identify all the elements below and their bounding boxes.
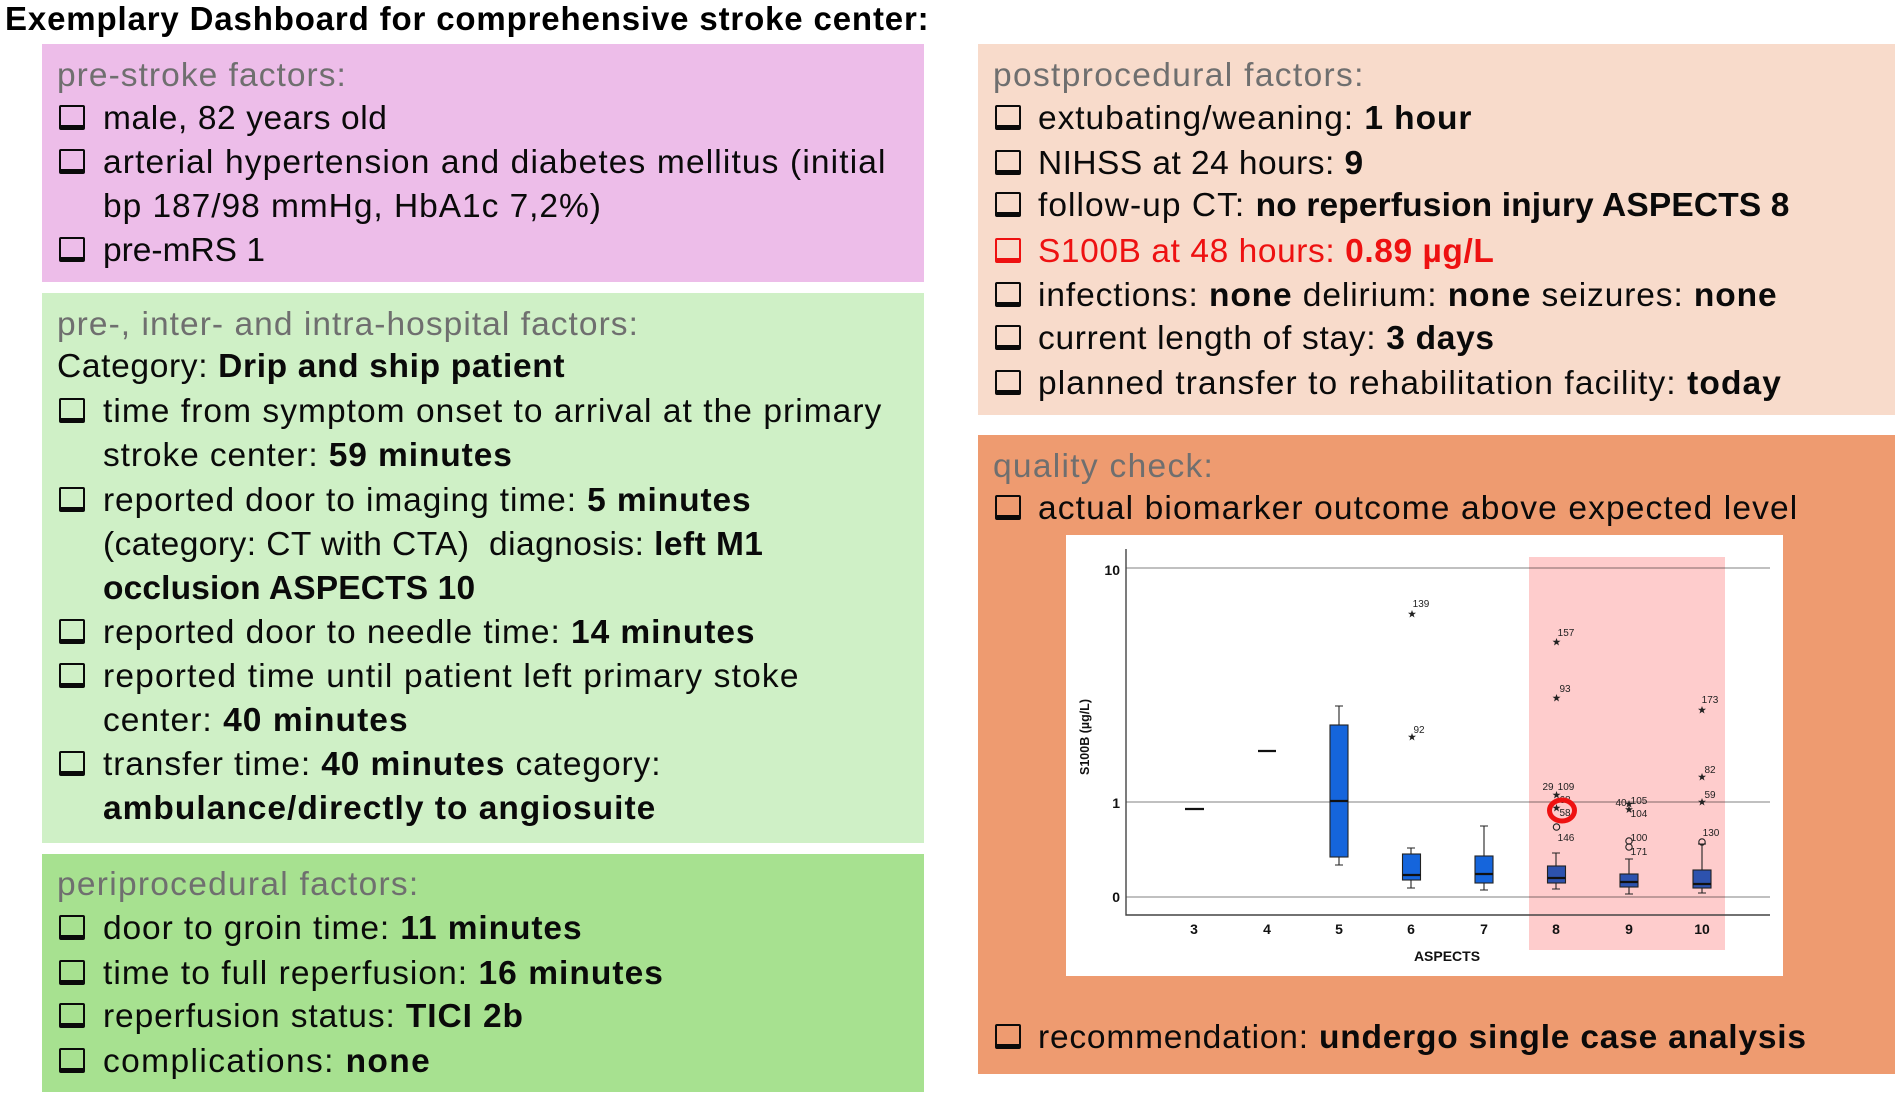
item: hypertension and diabetes: bp 187/98 mmHg, HbA1c 7,2%) <box>103 188 602 225</box>
outlier labels: 130 <box>1703 828 1720 839</box>
item: door to needle: reported door to needle time: 14 minutes <box>103 614 756 651</box>
x axis tick labels: 10 <box>1694 921 1710 937</box>
item: transfer time: transfer time: 40 minutes category: <box>103 746 661 783</box>
y axis tick labels <box>1104 562 1120 905</box>
highlight band <box>1529 557 1725 950</box>
item: transfer time: ambulance/directly to angiosuite <box>103 790 656 827</box>
title: Exemplary Dashboard for comprehensive stroke center: <box>5 0 930 37</box>
item: sex and age: male, 82 years old <box>103 100 388 137</box>
red ring: patient marker <box>1550 800 1574 821</box>
box: ASPECTS 6 <box>1402 848 1420 888</box>
outlier labels: 146 <box>1558 833 1575 844</box>
item: onset to arrival: time from symptom onset to arrival at the primary <box>103 393 882 430</box>
outlier labels: 157 <box>1558 628 1575 639</box>
outlier labels: 59 <box>1704 790 1716 801</box>
panel: pre-, inter- and intra-hospital factors <box>42 293 924 843</box>
item: extubating: extubating/weaning: 1 hour <box>1038 100 1472 137</box>
outlier labels: 92 <box>1413 725 1425 736</box>
panel: periprocedural factors <box>42 854 924 1092</box>
panel: quality check <box>978 435 1895 1074</box>
box: ASPECTS 7 <box>1475 826 1493 890</box>
y axis tick labels: 1 <box>1112 795 1120 811</box>
heading: pre-stroke factors: pre-stroke factors: <box>57 57 347 94</box>
axes <box>1126 549 1770 915</box>
heading: quality check: quality check: <box>993 448 1214 485</box>
outlier labels: 109 <box>1558 782 1575 793</box>
box: ASPECTS 8 <box>1548 853 1566 889</box>
x axis tick labels: 8 <box>1552 921 1560 937</box>
item: door to imaging: (category: CT with CTA) diagnosis: left M1 <box>103 526 763 563</box>
item: NIHSS: NIHSS at 24 hours: 9 <box>1038 145 1364 182</box>
item: onset to arrival <box>59 393 882 474</box>
outlier labels: 93 <box>1559 684 1571 695</box>
chart: S100B by ASPECTS box plot <box>1066 535 1783 976</box>
item: complications: complications: none <box>103 1043 431 1080</box>
outlier labels <box>1413 599 1720 858</box>
outlier labels: 40 <box>1615 798 1627 809</box>
outlier labels: 100 <box>1631 833 1648 844</box>
item: time until leaving primary center <box>59 658 800 739</box>
heading: postprocedural factors: postprocedural factors: <box>993 57 1365 94</box>
outlier labels: 105 <box>1631 796 1648 807</box>
box plots <box>1330 706 1711 894</box>
box: ASPECTS 5 <box>1330 706 1348 865</box>
item: door to imaging: occlusion ASPECTS 10 <box>103 570 475 607</box>
outlier stars <box>1408 610 1706 813</box>
item: time to reperfusion: time to full reperfusion: 16 minutes <box>103 955 664 992</box>
median lines for categories 3 and 4 <box>1185 751 1276 809</box>
item: reperfusion status: reperfusion status: TICI 2b <box>103 998 524 1035</box>
box: ASPECTS 9 <box>1620 859 1638 894</box>
x axis tick labels: 3 <box>1190 921 1198 937</box>
y axis tick labels: 10 <box>1104 562 1120 578</box>
panel: pre-stroke factors <box>42 44 924 282</box>
item: pre-mRS: pre-mRS 1 <box>103 232 265 269</box>
panel: postprocedural factors <box>978 44 1895 415</box>
box: ASPECTS 10 <box>1693 844 1711 893</box>
x axis tick labels: 7 <box>1480 921 1488 937</box>
item: S100B value: S100B at 48 hours: 0.89 µg/L <box>1038 233 1494 270</box>
item: follow-up CT: follow-up CT: no reperfusion injury ASPECTS 8 <box>1038 187 1790 224</box>
item: onset to arrival: stroke center: 59 minutes <box>103 437 513 474</box>
y axis tick labels: 0 <box>1112 889 1120 905</box>
item: door to groin: door to groin time: 11 minutes <box>103 910 582 947</box>
outlier labels: 58 <box>1559 808 1571 819</box>
y axis title: S100B (µg/L) <box>1078 699 1092 775</box>
outlier labels: 139 <box>1413 599 1430 610</box>
x axis title: ASPECTS <box>1414 948 1480 964</box>
heading: periprocedural factors: periprocedural factors: <box>57 866 420 903</box>
outlier labels: 68 <box>1559 795 1571 806</box>
item: recommendation: recommendation: undergo single case analysis <box>1038 1019 1807 1056</box>
item: biomarker outcome: actual biomarker outcome above expected level <box>1038 490 1798 527</box>
item: time until leaving primary center: reported time until patient left primary stoke <box>103 658 800 695</box>
item: hypertension and diabetes: arterial hypertension and diabetes mellitus (initial <box>103 144 887 181</box>
x axis tick labels: 9 <box>1625 921 1633 937</box>
item: length of stay: current length of stay: 3 days <box>1038 320 1495 357</box>
x axis tick labels: 6 <box>1407 921 1415 937</box>
outlier circles <box>1553 824 1705 850</box>
outlier labels: 82 <box>1704 765 1716 776</box>
outlier labels: 173 <box>1702 695 1719 706</box>
item: time until leaving primary center: center: 40 minutes <box>103 702 409 739</box>
item: hypertension and diabetes <box>59 144 887 225</box>
item: door to imaging: reported door to imaging time: 5 minutes <box>103 482 752 519</box>
outlier labels: 171 <box>1631 847 1648 858</box>
item: planned transfer: planned transfer to rehabilitation facility: today <box>1038 365 1782 402</box>
item: transfer time <box>59 746 661 827</box>
item: door to imaging <box>59 482 763 607</box>
x axis tick labels <box>1190 921 1710 937</box>
item: complications after procedure: infections: none delirium: none seizures: none <box>1038 277 1778 314</box>
heading: hospital factors: pre-, inter- and intra-hospital factors: <box>57 306 639 343</box>
outlier labels: 29 <box>1542 782 1554 793</box>
x axis tick labels: 5 <box>1335 921 1343 937</box>
x axis tick labels: 4 <box>1263 921 1271 937</box>
category line: Category: Drip and ship patient <box>57 348 565 385</box>
outlier labels: 104 <box>1631 809 1648 820</box>
